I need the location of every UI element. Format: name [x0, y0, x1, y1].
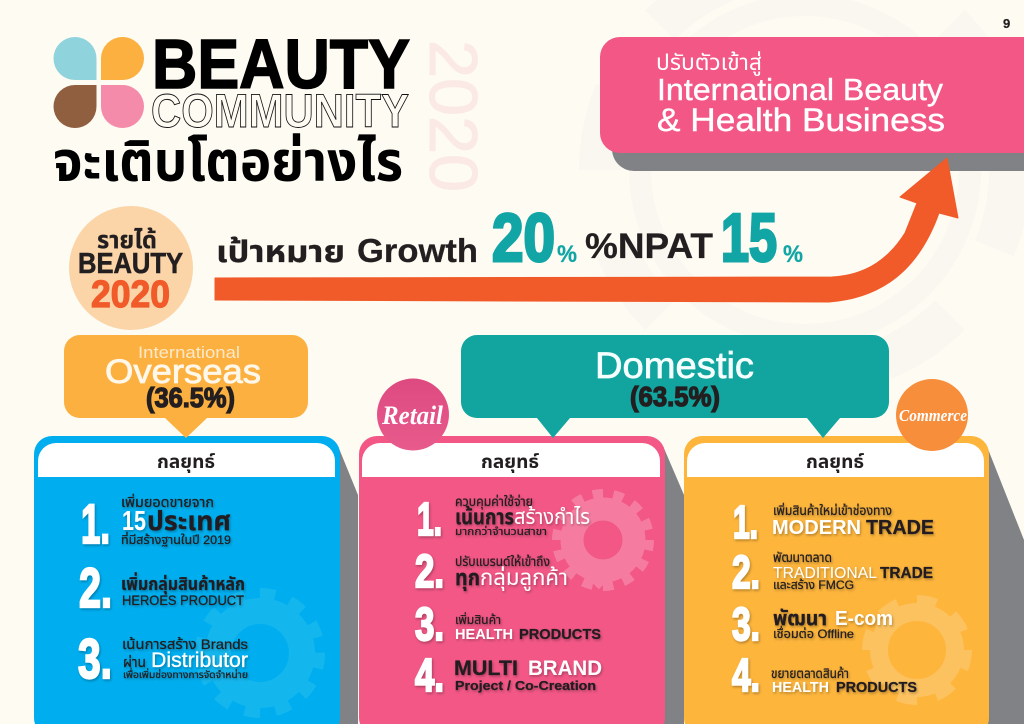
overseas item 1: ที่มีสร้างฐานในปี 2019: [121, 531, 231, 547]
commerce item 1: MODERN: [772, 517, 861, 539]
retail item 4: 4.: [415, 649, 444, 701]
panel: commerce: [684, 436, 989, 724]
callout: domestic: Domestic: [595, 345, 754, 386]
callout: domestic: (63.5%): [630, 381, 720, 412]
badge: retail: [377, 378, 449, 450]
commerce item 4: ขยายตลาดสินค้า: [771, 666, 849, 681]
overseas item 2: [79, 556, 245, 619]
commerce item 1: TRADE: [866, 517, 934, 539]
retail item 2: ปรับแบรนด์ให้เข้าถึง: [455, 554, 550, 569]
revenue circle: BEAUTY: [78, 248, 183, 280]
commerce item 1: เพิ่มสินค้าใหม่เข้าช่องทาง: [773, 502, 892, 518]
commerce item 4: PRODUCTS: [836, 679, 917, 696]
retail item 3: 3.: [415, 598, 444, 650]
overseas item 1: [81, 492, 231, 555]
target banner: pink box with grey shadow: ปรับตัวเข้าสู่: [656, 50, 762, 76]
commerce item 2: TRADITIONAL: [773, 565, 877, 582]
commerce item 2: [732, 546, 933, 598]
badge: commerce: [896, 379, 968, 451]
commerce item 4: HEALTH: [772, 679, 829, 696]
overseas item 2: เพิ่มกลุ่มสินค้าหลัก: [121, 572, 245, 595]
overseas item 3: เพื่อเพิ่มช่องทางการจัดจำหน่าย: [123, 667, 248, 681]
retail item 2: 2.: [415, 545, 444, 597]
panel: commerce: กลยุทธ์: [806, 452, 864, 473]
panel: retail: [359, 436, 665, 724]
overseas item 3: เน้นการสร้าง Brands: [122, 636, 248, 652]
callout: overseas: (36.5%): [146, 382, 235, 413]
revenue circle: 2020: [91, 274, 170, 316]
retail item 1: เน้นการ: [455, 506, 514, 529]
growth target text: 20: [492, 200, 555, 276]
title: BEAUTY: BEAUTY: [152, 25, 410, 103]
panel: overseas: กลยุทธ์: [157, 452, 215, 473]
retail item 4: MULTI: [454, 657, 518, 680]
target banner: pink box with grey shadow: & Health Business: [657, 102, 945, 138]
target banner: pink box with grey shadow: International Beauty: [657, 72, 944, 107]
retail item 4: Project / Co-Creation: [455, 678, 596, 693]
commerce item 2: พัฒนาตลาด: [773, 550, 832, 565]
commerce item 3: เชื่อมต่อ Offline: [773, 625, 854, 641]
logo: four petals: [53, 37, 144, 128]
panel: retail: กลยุทธ์: [481, 452, 539, 473]
callout: domestic: [461, 335, 889, 438]
revenue circle: รายได้: [97, 226, 157, 254]
retail item 1: สร้างกำไร: [514, 505, 590, 529]
callout: overseas: [64, 335, 308, 438]
overseas item 1: ประเทศ: [147, 506, 231, 536]
commerce item 1: 1.: [733, 496, 758, 548]
overseas item 1: เพิ่มยอดขายจาก: [121, 493, 214, 510]
callout: overseas: Overseas: [105, 353, 261, 391]
growth target text: %NPAT: [585, 227, 713, 266]
growth target text: 15: [721, 200, 777, 276]
overseas item 1: 15: [122, 505, 146, 536]
retail item 2: ทุก: [455, 565, 480, 591]
title: COMMUNITY: COMMUNITY: [151, 84, 409, 137]
retail item 1: ควบคุมค่าใช้จ่าย: [455, 494, 533, 509]
commerce item 3: [732, 598, 893, 650]
commerce item 2: TRADE: [880, 565, 933, 582]
commerce item 3: พัฒนา: [773, 608, 827, 630]
growth target text: เป้าหมาย: [216, 236, 345, 269]
panel: overseas: [34, 436, 340, 724]
growth target text: Growth: [357, 232, 478, 269]
retail item 2: [415, 545, 568, 597]
retail item 1: 1.: [417, 493, 442, 545]
commerce item 2: 2.: [732, 546, 760, 598]
overseas item 3: [78, 627, 248, 690]
commerce item 4: 4.: [732, 649, 760, 701]
commerce item 2: และสร้าง FMCG: [773, 578, 854, 592]
retail item 1: [417, 493, 590, 545]
callout: overseas: International: [138, 343, 240, 362]
retail item 3: เพิ่มสินค้า: [455, 612, 501, 627]
overseas item 3: 3.: [78, 627, 112, 690]
commerce item 3: E-com: [835, 608, 893, 630]
retail item 3: HEALTH: [455, 626, 513, 643]
commerce item 4: [732, 649, 917, 701]
badge: retail: Retail: [381, 401, 444, 430]
target banner: pink box with grey shadow: [600, 37, 1024, 171]
growth target text: %: [557, 241, 577, 268]
retail item 2: กลุ่มลูกค้า: [480, 565, 568, 591]
growth target text: [216, 200, 803, 276]
retail item 1: มากกว่าจำนวนสาขา: [455, 525, 547, 538]
vertical year 2020: 2020: [415, 40, 491, 192]
retail item 3: PRODUCTS: [519, 626, 601, 643]
commerce item 3: 3.: [732, 598, 760, 650]
growth arrow: [215, 158, 958, 302]
retail item 3: [415, 598, 601, 650]
overseas item 3: Distributor: [151, 649, 248, 672]
overseas item 2: HEROES PRODUCT: [122, 592, 244, 608]
retail item 4: [415, 649, 602, 701]
overseas item 3: ผ่าน: [123, 654, 146, 670]
title: Thai subtitle: จะเติบโตอย่างไร: [53, 130, 403, 193]
retail item 4: BRAND: [528, 657, 602, 680]
panel shadows: [338, 444, 1024, 724]
commerce item 1: [733, 496, 934, 548]
revenue circle: [69, 206, 193, 330]
badge: commerce: Commerce: [899, 406, 967, 425]
growth target text: %: [783, 241, 803, 268]
overseas item 2: 2.: [79, 556, 112, 619]
page number: 9: [1003, 16, 1010, 31]
overseas item 1: 1.: [81, 492, 110, 555]
